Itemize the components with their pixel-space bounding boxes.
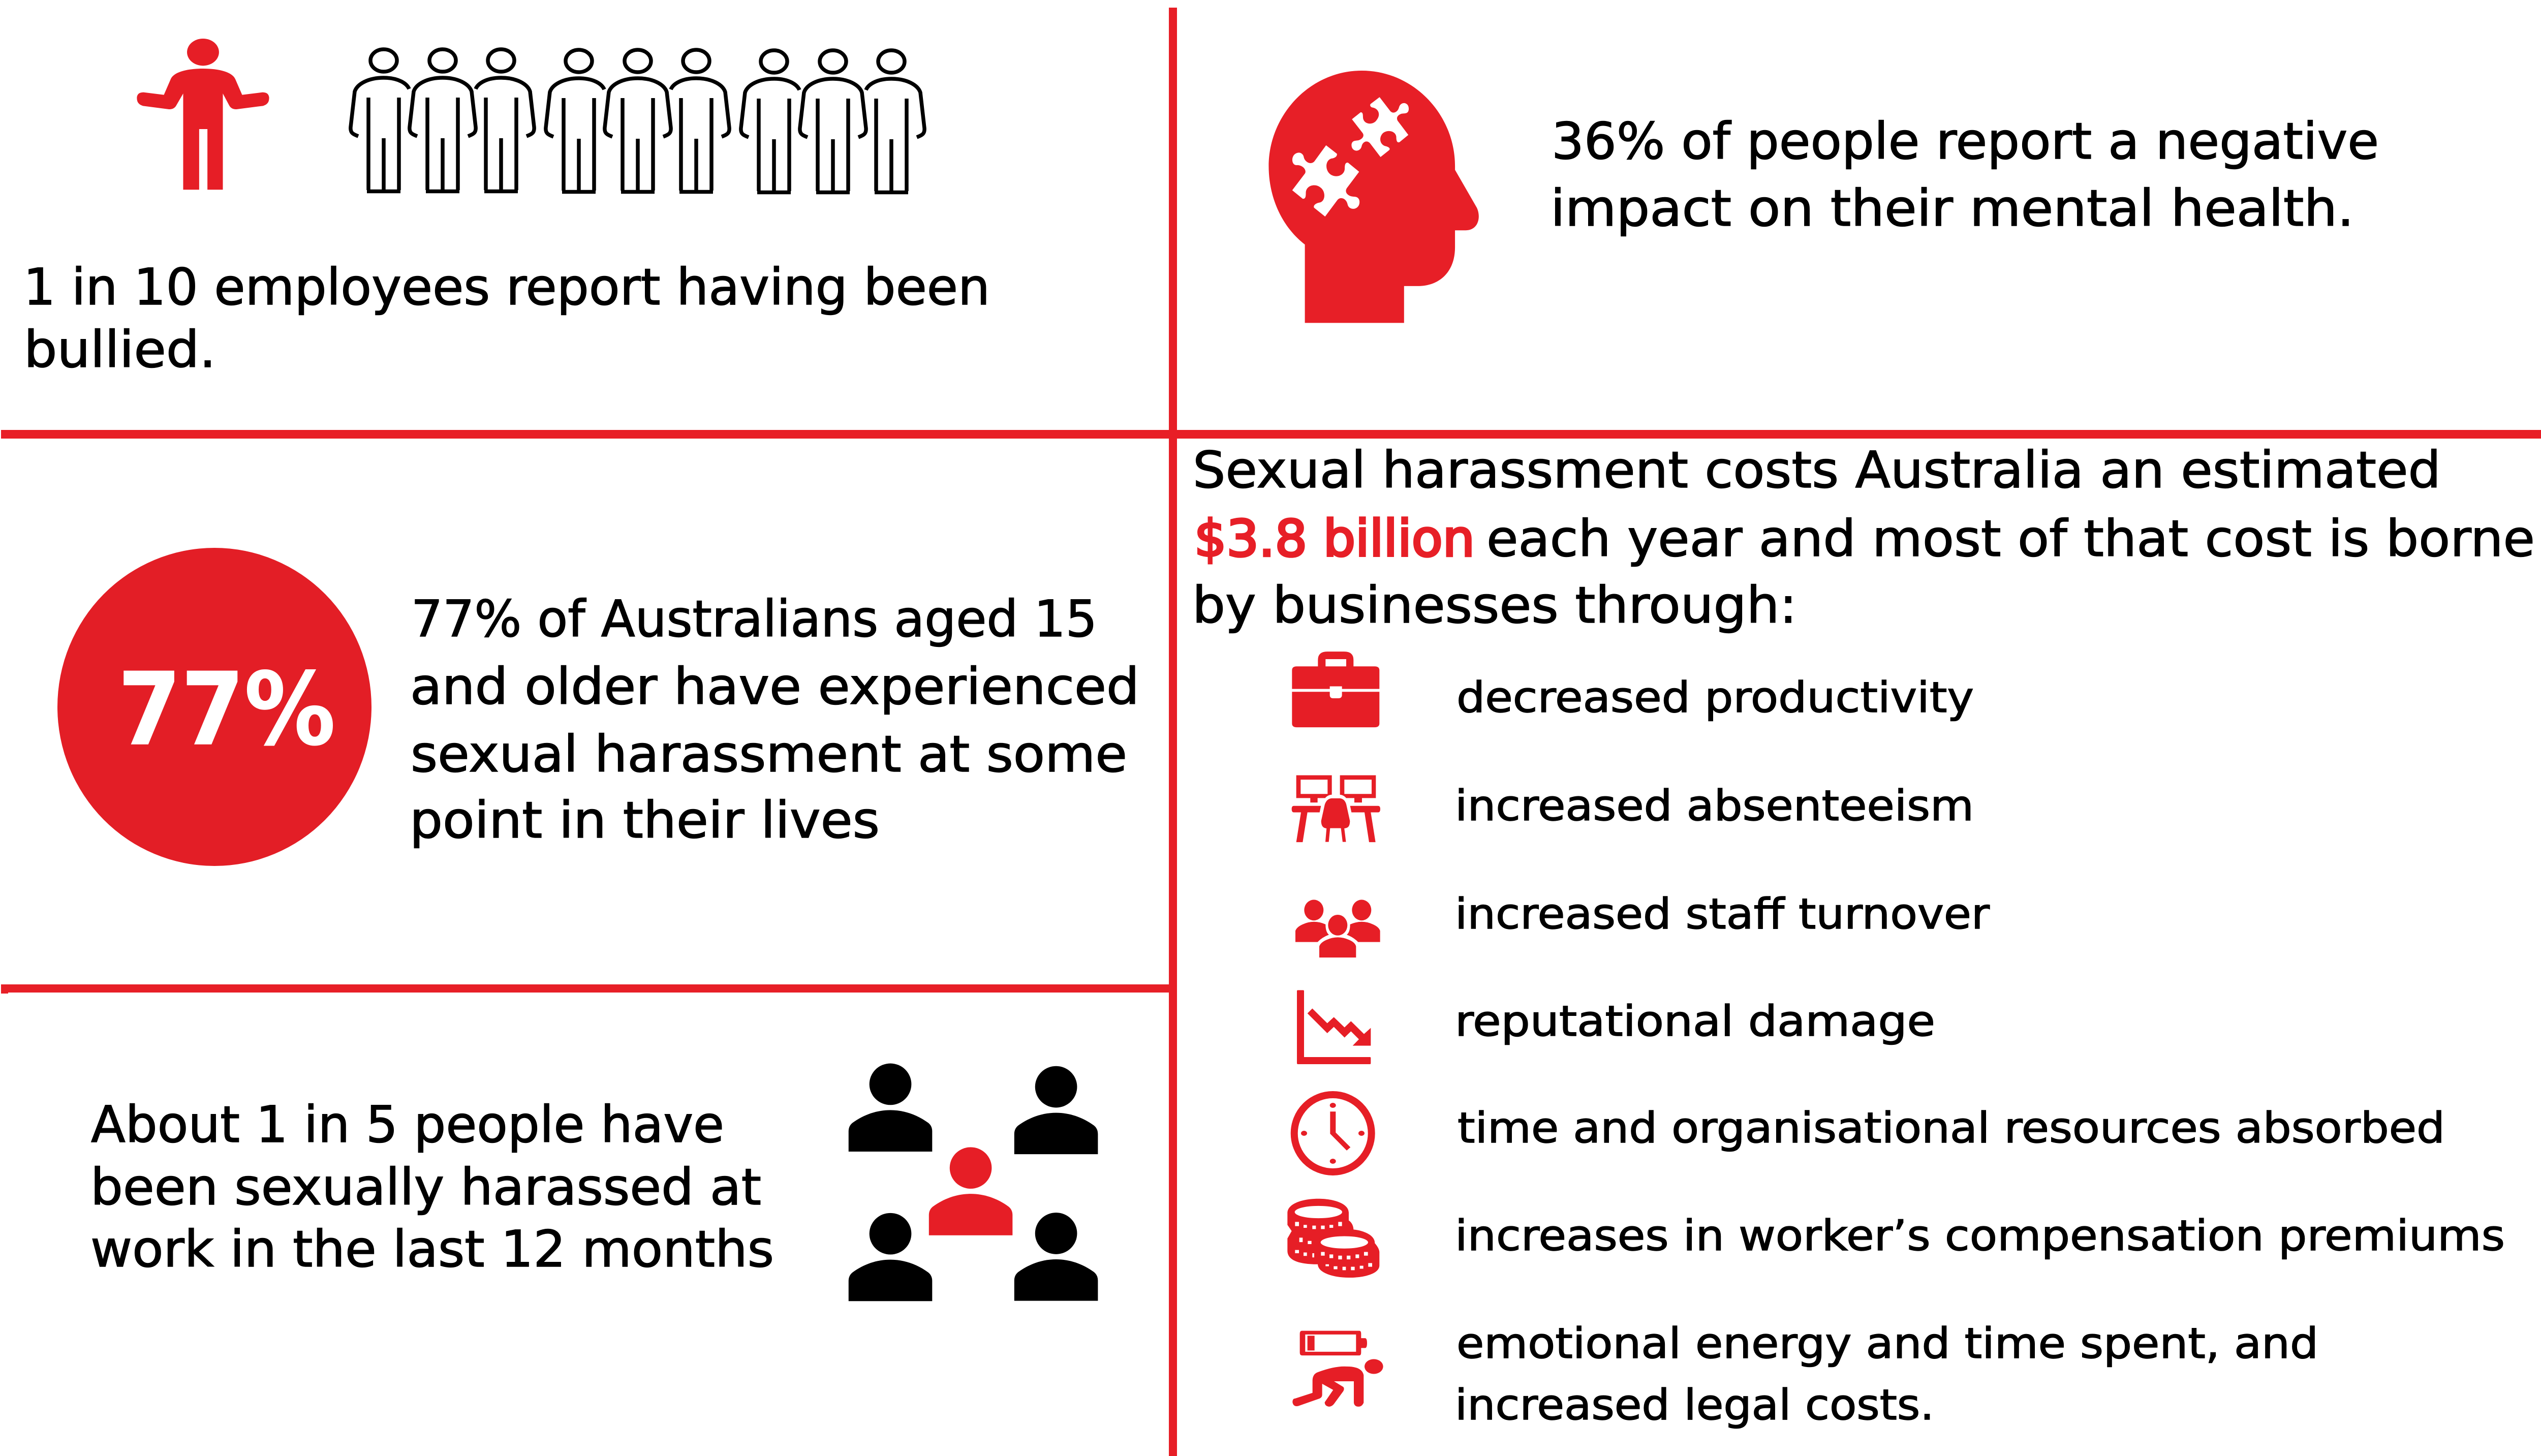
text: about 1 in 5 people: been sexually harassed at: [90, 1158, 761, 1217]
icon: red person with shrugging arms: [137, 39, 269, 190]
text: 36% mental health: impact on their mental health.: [1551, 179, 2354, 238]
text: increased absenteeism: increased absenteeism: [1455, 781, 1974, 830]
circle badge with 77%: 77%: [118, 652, 335, 768]
panel: cost of sexual harassment: [1192, 441, 2535, 1430]
icon: group of five people with one in red: [849, 1064, 1098, 1301]
text: 77% of Australians: and older have experienced: [410, 658, 1139, 716]
text: 1 in 10 employees: 1 in 10 employees report having been: [23, 258, 990, 317]
text: emotional energy and legal costs: [1455, 1319, 2318, 1430]
icon: stacks of coins: [1287, 1199, 1379, 1278]
text: 36% mental health: [1551, 112, 2379, 238]
heading: cost statement: [1192, 441, 2535, 635]
text: 77% of Australians: [410, 590, 1139, 850]
text: time and organisational resources absorbed: time and organisational resources absorbed: [1458, 1103, 2445, 1153]
panel: mental health statistic: [1268, 71, 2379, 323]
text: about 1 in 5 people: [90, 1096, 774, 1279]
heading: cost statement: each year and most of that cost is borne: [1486, 510, 2535, 568]
text: about 1 in 5 people: About 1 in 5 people have: [91, 1096, 724, 1154]
text: emotional energy and legal costs: increased legal costs.: [1455, 1380, 1934, 1430]
panel: 1 in 5 harassed at work: [90, 1064, 1098, 1301]
text: 77% of Australians: 77% of Australians aged 15: [411, 590, 1097, 648]
text: increases in worker's compensation premiums: increases in worker’s compensation premiums: [1455, 1211, 2505, 1260]
text: increased staff turnover: increased staff turnover: [1455, 889, 1990, 939]
icon: briefcase: [1292, 652, 1379, 727]
text: about 1 in 5 people: work in the last 12 months: [90, 1220, 774, 1279]
icon: group of staff: [1295, 900, 1380, 957]
text: 77% of Australians: point in their lives: [410, 791, 880, 850]
icon: nine outlined people: [351, 49, 924, 192]
icon: low battery and exhausted person: [1292, 1331, 1383, 1407]
panel: 77% statistic: [57, 548, 1139, 866]
text: 77% of Australians: sexual harassment at some: [411, 725, 1127, 784]
icon: falling line chart: [1297, 990, 1371, 1064]
text: 1 in 10 employees: [23, 258, 990, 379]
heading: cost statement: $3.8 billion: [1194, 510, 1475, 568]
text: reputational damage: reputational damage: [1455, 997, 1935, 1046]
icon: empty desks and chair: [1292, 776, 1380, 844]
text: 1 in 10 employees: bullied.: [24, 321, 216, 379]
circle badge with 77%: [57, 548, 371, 866]
icon: clock: [1294, 1095, 1372, 1172]
text: emotional energy and legal costs: emotional energy and time spent, and: [1457, 1319, 2318, 1368]
icon: head with puzzle pieces: [1268, 71, 1479, 323]
text: 36% mental health: 36% of people report a negative: [1552, 112, 2379, 171]
text: decreased productivity: decreased productivity: [1457, 673, 1974, 722]
heading: cost statement: by businesses through:: [1192, 576, 1797, 635]
heading: cost statement: Sexual harassment costs Australia an estimated: [1193, 441, 2441, 500]
panel: bullying statistic: [23, 39, 990, 379]
